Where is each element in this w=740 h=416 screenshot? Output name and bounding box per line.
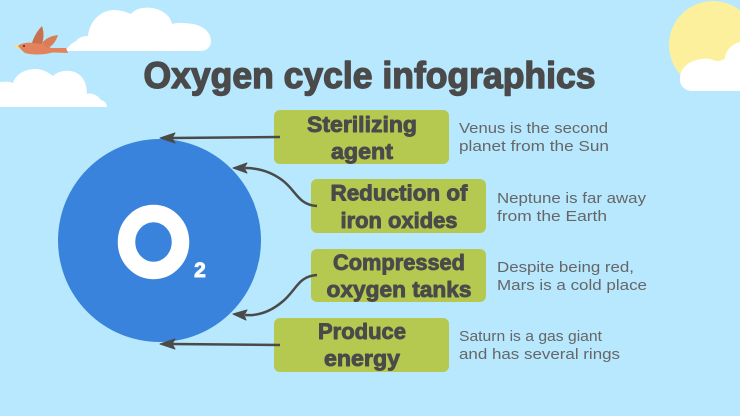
arrow: produce energy <box>160 339 280 349</box>
description: Mars: Mars is a cold place <box>497 278 647 294</box>
icon: cloud over sun <box>680 42 740 91</box>
panel: compressed oxygen tanks: Compressed <box>333 250 465 275</box>
description: Venus: Venus is the second <box>459 121 608 137</box>
description: Saturn: Saturn is a gas giant <box>459 329 602 345</box>
panel: reduction of iron oxides: Reduction of <box>330 180 468 206</box>
panel: reduction of iron oxides: iron oxides <box>340 208 458 233</box>
O2 symbol <box>126 214 206 282</box>
description: Neptune <box>497 191 647 225</box>
description: Neptune: from the Earth <box>497 209 607 225</box>
panel: sterilizing agent: Sterilizing <box>307 112 417 137</box>
panel: compressed oxygen tanks <box>311 249 486 302</box>
description: Mars: Despite being red, <box>497 260 634 276</box>
panel: reduction of iron oxides <box>311 179 486 233</box>
arrow: compressed oxygen tanks <box>233 275 317 320</box>
panel: produce energy: Produce <box>318 319 406 344</box>
description: Venus <box>459 121 609 155</box>
panel: produce energy: energy <box>324 346 401 371</box>
arrow: reduction of iron oxides <box>233 163 317 206</box>
icon: cloud left <box>0 69 107 107</box>
description: Saturn <box>459 329 620 363</box>
icon: cloud top left <box>66 8 211 51</box>
panel: produce energy <box>274 318 449 372</box>
description: Saturn: and has several rings <box>459 347 620 363</box>
O2 symbol: 2 <box>194 259 206 282</box>
arrow: sterilizing agent <box>160 133 280 143</box>
description: Neptune: Neptune is far away <box>497 191 647 207</box>
oxygen circle <box>58 139 261 342</box>
description: Venus: planet from the Sun <box>459 139 609 155</box>
description: Mars <box>497 260 647 294</box>
icon: bird <box>13 26 68 54</box>
panel: sterilizing agent: agent <box>331 139 394 164</box>
icon: sun <box>669 1 740 89</box>
panel: sterilizing agent <box>274 110 449 164</box>
title: Oxygen cycle infographics <box>144 55 596 96</box>
panel: compressed oxygen tanks: oxygen tanks <box>326 277 472 302</box>
